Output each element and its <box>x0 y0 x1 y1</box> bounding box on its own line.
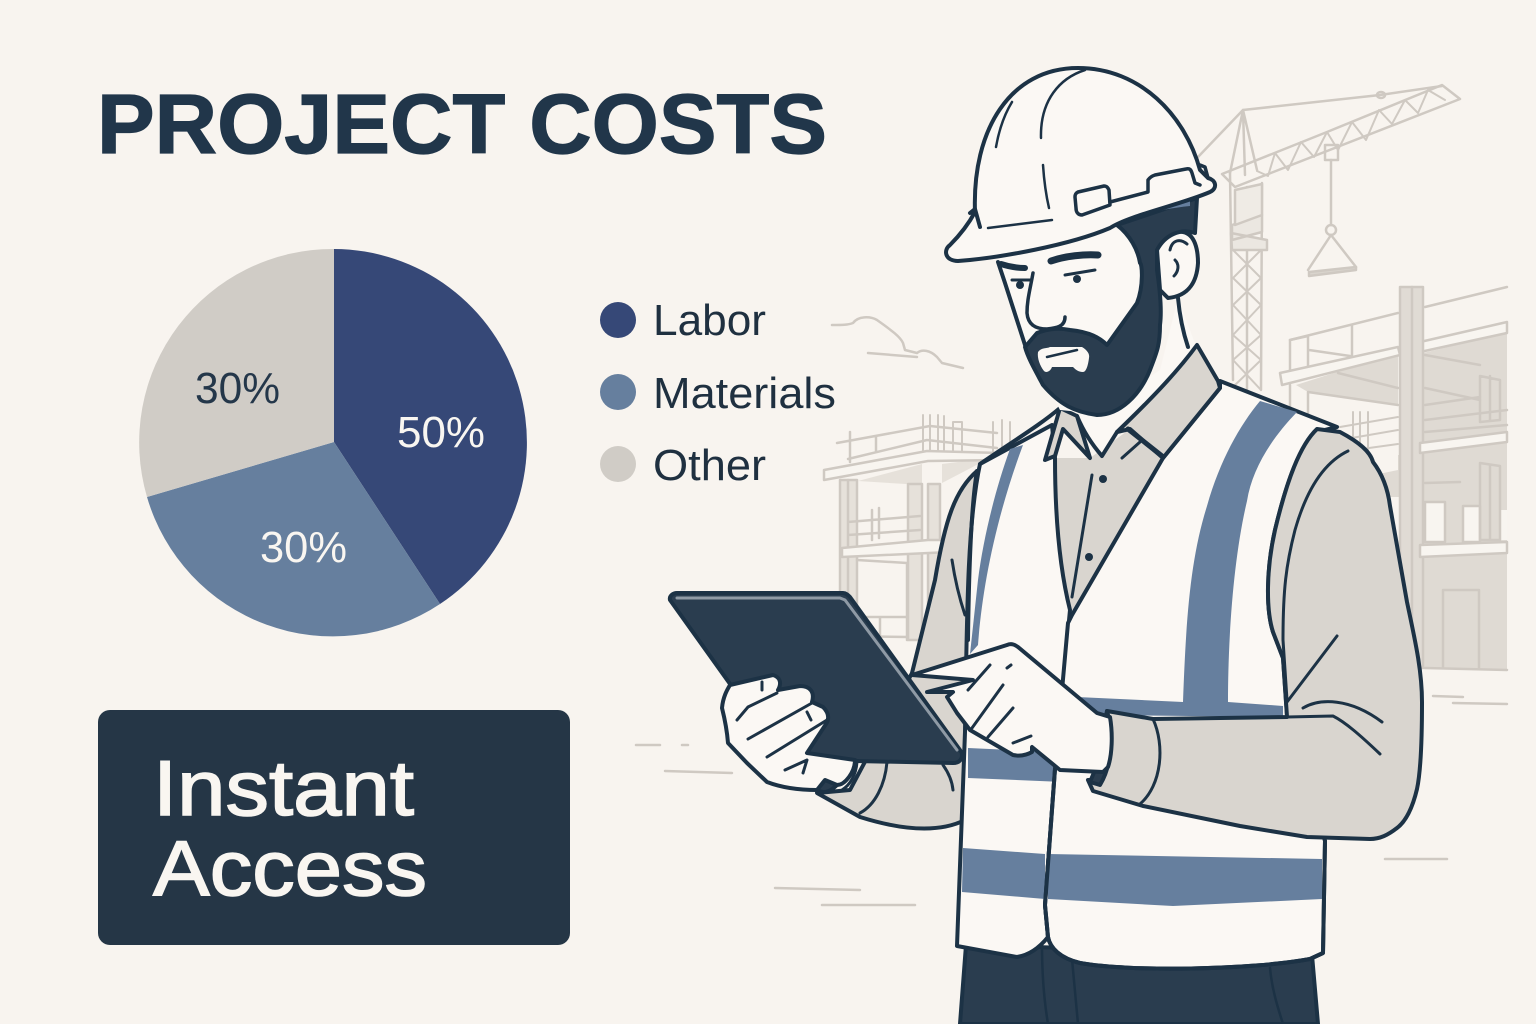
collars and buttons <box>980 345 1220 597</box>
sleeve cuff lines under left hand <box>842 762 953 813</box>
right arm sleeve <box>1088 429 1422 839</box>
callout: instant access <box>98 710 570 945</box>
background: construction scene <box>636 85 1507 905</box>
safety vest: right panel <box>1045 381 1337 969</box>
hard hat <box>946 68 1215 261</box>
legend: labor: Labor <box>653 296 766 345</box>
callout: instant access: Instant <box>153 744 414 832</box>
eyebrows and eyes <box>1051 255 1098 261</box>
hair and beard <box>1025 198 1197 415</box>
tablet <box>670 593 962 763</box>
nose <box>1027 273 1065 329</box>
mouth <box>1038 347 1089 372</box>
slice: other 30% <box>139 249 334 497</box>
crane <box>1198 85 1460 395</box>
title: PROJECT COSTS <box>97 77 827 171</box>
ground lines <box>636 696 1507 905</box>
slice: materials 30% <box>147 442 440 636</box>
left building under construction <box>824 415 1010 640</box>
pie chart: project costs <box>139 249 527 636</box>
legend: other: Other <box>653 441 766 490</box>
legend: other <box>600 441 766 490</box>
callout: instant access: Access <box>153 824 427 912</box>
cloud <box>832 317 963 368</box>
value: 30% materials: 30% <box>260 523 347 572</box>
right hand pointing at tablet <box>912 644 1112 772</box>
safety vest: left panel <box>952 425 1087 957</box>
icon: ear <box>1157 232 1198 298</box>
legend <box>600 296 836 490</box>
slice: labor 50% <box>334 249 527 604</box>
shirt and neck <box>1055 298 1197 615</box>
value: 30% other: 30% <box>195 364 280 413</box>
left hand gripping tablet <box>722 675 855 792</box>
left sleeve <box>817 471 977 829</box>
right building under construction <box>1280 287 1507 670</box>
trousers <box>960 945 1318 1024</box>
legend: labor <box>600 296 766 345</box>
legend: materials: Materials <box>653 369 836 418</box>
illustration: construction worker <box>670 68 1422 1024</box>
value: 50%: 50% <box>397 408 485 457</box>
head: face and beard <box>998 198 1198 415</box>
